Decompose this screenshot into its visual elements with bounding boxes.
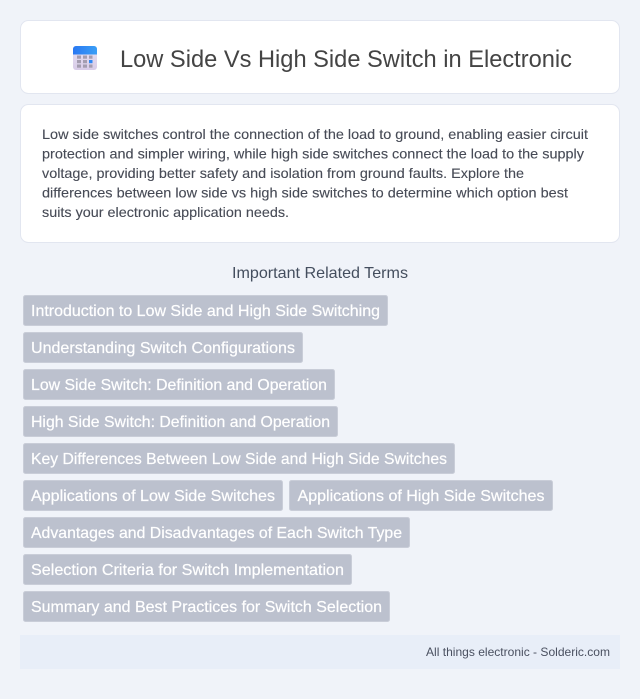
tag: selection criteria: Selection Criteria for Switch Implementation bbox=[31, 562, 344, 579]
tag: selection criteria bbox=[24, 554, 352, 584]
tag: high side switch: High Side Switch: Definition and Operation bbox=[31, 414, 330, 431]
footer: All things electronic - Solderic.com bbox=[426, 645, 610, 659]
footer bbox=[20, 635, 620, 669]
header panel bbox=[20, 20, 620, 94]
tag: advantages and disadvantages bbox=[24, 518, 410, 548]
description text: protection and simpler wiring, while high side switches connect the load to the supply bbox=[42, 146, 584, 162]
heading: important related terms: Important Related Terms bbox=[232, 265, 408, 282]
tag: understanding configurations: Understanding Switch Configurations bbox=[31, 340, 295, 357]
tag: advantages and disadvantages: Advantages and Disadvantages of Each Switch Type bbox=[31, 525, 402, 542]
description text: suits your electronic application needs. bbox=[42, 204, 289, 220]
tag: applications of high side: Applications of High Side Switches bbox=[298, 488, 544, 505]
tag: applications of low side: Applications of Low Side Switches bbox=[31, 488, 275, 505]
tag: applications of low side bbox=[24, 480, 282, 510]
title: Low Side Vs High Side Switch in Electronic bbox=[120, 46, 572, 73]
tag: applications of high side bbox=[290, 480, 552, 510]
tag: summary and best practices bbox=[24, 592, 390, 622]
description text bbox=[42, 126, 588, 220]
tag: low side switch bbox=[24, 370, 334, 400]
tag: summary and best practices: Summary and Best Practices for Switch Selection bbox=[31, 599, 382, 616]
tag: key differences bbox=[24, 444, 454, 474]
tag: understanding configurations bbox=[24, 332, 302, 362]
tag: key differences: Key Differences Between Low Side and High Side Switches bbox=[31, 451, 447, 468]
tag: high side switch bbox=[24, 406, 338, 436]
description text: voltage, providing better safety and isolation from ground faults. Explore the bbox=[42, 165, 524, 181]
tag: introduction: Introduction to Low Side and High Side Switching bbox=[31, 303, 380, 320]
tag: low side switch: Low Side Switch: Definition and Operation bbox=[31, 377, 327, 394]
icon: calendar grid bbox=[73, 46, 97, 70]
description text: differences between low side vs high side switches to determine which option best bbox=[42, 184, 568, 200]
panel: description bbox=[20, 104, 620, 242]
tag: introduction bbox=[24, 296, 388, 326]
description text: Low side switches control the connection of the load to ground, enabling easier circuit bbox=[42, 126, 588, 142]
